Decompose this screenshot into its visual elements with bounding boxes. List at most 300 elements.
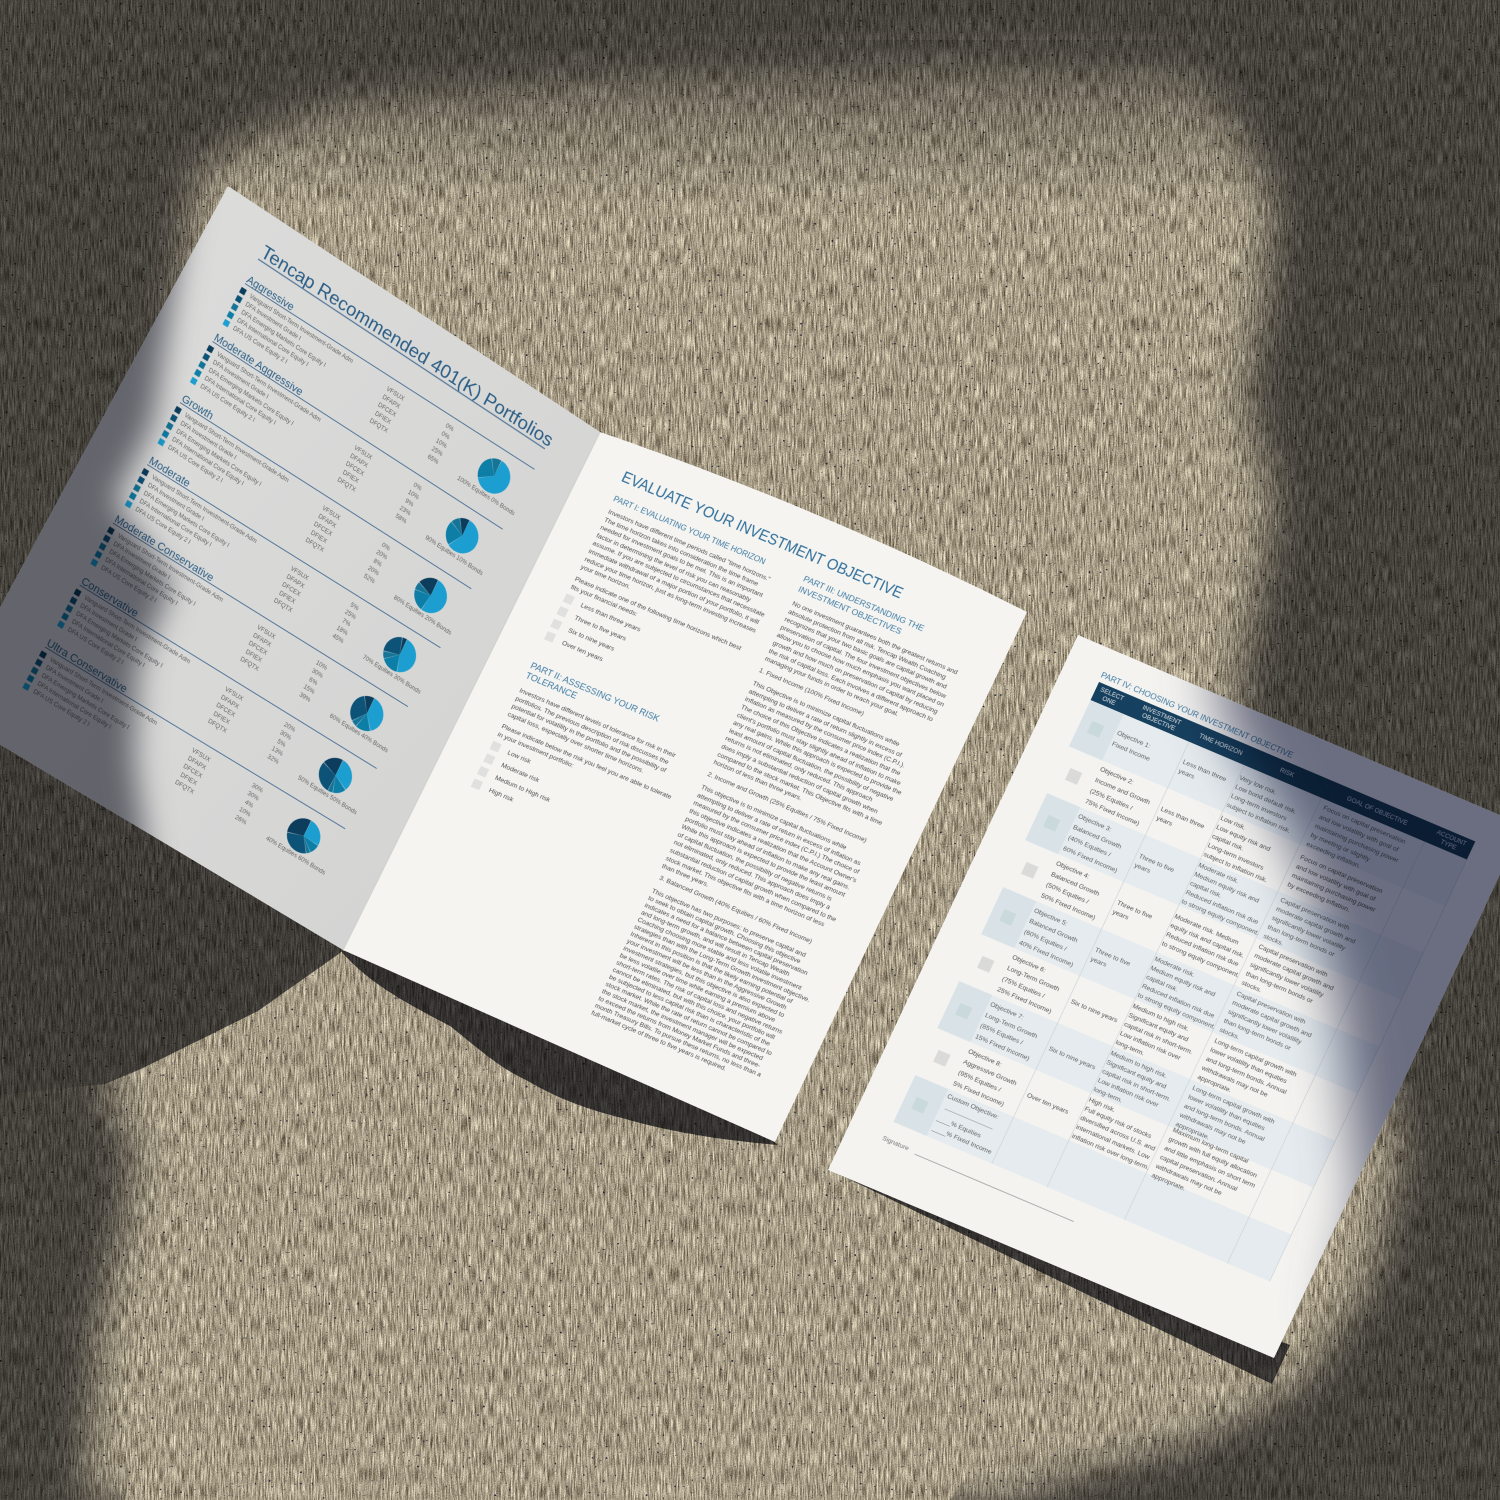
section: Growth: 8%	[372, 558, 383, 569]
row: objective 1: Fixed Income	[1110, 741, 1151, 763]
row: objective 6: lower volatility than equities	[1209, 1047, 1289, 1085]
row: objective 8: capital preservation. Annual	[1159, 1154, 1239, 1193]
section: Aggressive: DFA International Core Equity I	[236, 317, 309, 369]
row: objective 4: stocks.	[1240, 980, 1263, 994]
heading: Part IV: PART IV: CHOOSING YOUR INVESTMENT OBJECTIVE	[1099, 670, 1295, 760]
row: objective 7: (85% Equities /	[979, 1023, 1024, 1047]
left page shadow	[0, 232, 204, 844]
text block: Part II risk tolerance: Moderate risk	[500, 762, 541, 784]
text block: Part I time horizon: needed for investment goals to be met. This is an important	[599, 525, 764, 599]
row: objective 5: Reduced inflation risk due	[1141, 983, 1216, 1020]
section: Moderate: DFAPX	[285, 573, 305, 590]
section: Ultra Conservative: DFA Emerging Markets Core Equity I	[40, 672, 130, 731]
row: objective 6: 25% Fixed Income)	[996, 986, 1053, 1015]
row: objective 6: appropriate.	[1196, 1074, 1233, 1094]
text block: Part III understanding objectives: Coaching choosing more stable and less volatile investment	[636, 916, 803, 992]
section: Moderate Conservative: DFA International Core Equity I	[104, 557, 179, 608]
text block: Part III understanding objectives: short-term rates. The risk of capital loss and negative returns	[615, 959, 784, 1036]
text block: Part III understanding objectives: allow you to choose how much emphasis you want placed on	[775, 632, 945, 709]
text block: Part III understanding objectives: not eliminated, only reduced. This approach does imply a	[672, 839, 831, 912]
text block: Part III understanding objectives: substantial reduction of capital growth when compared to the	[668, 847, 837, 924]
section: Moderate Conservative: DFA Emerging Markets Core Equity I	[108, 549, 197, 608]
text block: Part I time horizon: Six to nine years	[567, 627, 616, 653]
title: Tencap Recommended 401(K) Portfolios: Tencap Recommended 401(K) Portfolios	[258, 242, 556, 451]
text block: Part III understanding objectives: Inherent in this position is that the likely earning potential of	[629, 931, 794, 1005]
section: Ultra Conservative: 30%	[246, 790, 260, 803]
row: objective 2: maintaining purchasing power	[1290, 872, 1377, 914]
text block: Part III understanding objectives: month Treasury Bills. To pursue these returns, no less than a	[594, 1002, 763, 1079]
row: objective 3: capital risk.	[1189, 880, 1223, 900]
section: Aggressive: DFA Emerging Markets Core Equity I	[240, 309, 327, 369]
row: objective 1: and low volatility with goal of	[1318, 814, 1400, 854]
text block: Part III understanding objectives: your investment will be less than in the Aggressive Growth	[626, 938, 788, 1011]
section: Ultra Conservative	[20, 637, 352, 877]
section: Aggressive	[220, 273, 542, 517]
text block: Part III understanding objectives: compared to the stock market. This Objective fits with a time	[716, 751, 884, 827]
section: Aggressive: VFSUX	[385, 386, 405, 403]
row: objective 5: capital risk.	[1145, 974, 1179, 994]
right page shadow	[1205, 660, 1500, 1400]
row: objective 2: and low volatility with goal of	[1295, 863, 1377, 903]
text block: Part III understanding objectives: least amount of capital fluctuation, the possibility of negative	[728, 728, 895, 803]
section: Ultra Conservative: 40% Equities 60% Bonds	[265, 836, 326, 877]
text block: Part III understanding objectives: be subjected to less capital risk than is characteristic of the	[608, 974, 771, 1048]
row: objective 4: Reduced inflation risk due	[1165, 932, 1240, 968]
row: objective 3: to strong equity component.	[1180, 898, 1260, 937]
text block: Part III understanding objectives: absolute protection from all risk. Tencap Wealth Coaching	[787, 608, 947, 681]
text block: Part III understanding objectives: of capital fluctuation, the possibility of negative returns is	[676, 832, 834, 903]
section: Moderate: 25%	[343, 609, 358, 622]
pie chart: Ultra Conservative	[281, 812, 326, 860]
text block: Part III understanding objectives: indicates a need for a balance between capital preservation	[643, 902, 809, 977]
section: Conservative: VFSUX	[223, 686, 244, 703]
section: Moderate Conservative: 10%	[314, 659, 329, 672]
text block: Part III understanding objectives: this objective indicates a realization that the Account Owner's	[688, 808, 858, 885]
row: objective 6: Six to nine years	[1069, 998, 1119, 1024]
section: Moderate: 18%	[335, 625, 349, 638]
section: Conservative: 32%	[266, 753, 280, 766]
row: custom objective: Custom Objective:	[946, 1093, 1000, 1121]
row: objective 5: 40% Fixed Income)	[1018, 939, 1074, 968]
section: Moderate Conservative: DFA US Core Equity 2 I	[100, 565, 158, 605]
row: objective 6: Long-Term Growth	[1006, 965, 1061, 993]
row: objective 4: (50% Equities /	[1045, 882, 1090, 906]
section: Conservative: 5%	[276, 738, 287, 749]
pie chart: Moderate Aggressive	[440, 511, 484, 560]
section: Ultra Conservative: 4%	[243, 799, 255, 810]
text block: Part I time horizon: PART I: EVALUATING YOUR TIME HORIZON	[612, 494, 767, 566]
table header: RISK	[1279, 767, 1296, 779]
row: custom objective: ____% Fixed Income	[930, 1124, 993, 1156]
row: objective 4: 50% Fixed Income)	[1040, 892, 1096, 922]
section: Ultra Conservative: DFAPX	[186, 755, 207, 772]
row: objective 2: Less than three	[1159, 806, 1206, 831]
section: Moderate Aggressive: DFCEX	[344, 460, 365, 478]
row: objective 8: growth with full equity allocation	[1167, 1136, 1258, 1180]
row: objective 1: Objective 1:	[1116, 730, 1152, 750]
section: Moderate Aggressive: DFA US Core Equity 2 I	[199, 383, 256, 424]
section: Moderate Conservative: 6%	[308, 676, 319, 687]
row: objective 5: than long-term bonds or	[1222, 1018, 1292, 1053]
row: objective 1: maintaining purchasing power	[1313, 823, 1400, 865]
section: Moderate Conservative: Vanguard Short-Term Investment-Grade Adm	[116, 533, 224, 604]
row: objective 2: years	[1155, 815, 1174, 828]
section: Conservative: DFA International Core Equity I	[70, 619, 146, 669]
section: Growth: DFCEX	[312, 521, 333, 538]
section: Moderate Aggressive: Moderate Aggressive	[212, 332, 305, 399]
row: objective 7: lower volatility than equities	[1187, 1094, 1267, 1132]
section: Aggressive: Aggressive	[245, 274, 296, 314]
section: Ultra Conservative: 30%	[250, 782, 265, 795]
section: Conservative: DFAPX	[219, 694, 240, 711]
text block: Part III understanding objectives: preservation of capital. The four investment objectives below	[779, 624, 947, 700]
row: objective 5	[1017, 905, 1317, 1067]
row: objective 5: significantly lower volatility	[1227, 1009, 1303, 1046]
section: Ultra Conservative: DFIEX	[179, 772, 198, 787]
section: Aggressive: 25%	[430, 445, 444, 459]
row: objective 3	[1061, 811, 1361, 973]
section: Ultra Conservative: DFQTX	[174, 779, 195, 796]
row: objective 6: capital risk in short-term.	[1123, 1021, 1194, 1056]
section: Moderate: 70% Equities 30% Bonds	[361, 655, 421, 696]
text block: Part III understanding objectives: portfolio must stay ahead of inflation to make any real gains.	[684, 816, 851, 891]
row: objective 2: Income and Growth	[1094, 777, 1151, 807]
row: objective 5: Three to five	[1094, 947, 1131, 968]
section: Ultra Conservative: 10%	[238, 806, 252, 819]
section: Moderate Conservative: 15%	[302, 683, 316, 696]
signature line: Signature	[881, 1135, 910, 1153]
text block: Part I time horizon: fits your financial needs:	[569, 584, 639, 618]
row: objective 8: and little emphasis on short term	[1163, 1145, 1256, 1190]
row: objective 2: Low risk.	[1219, 815, 1247, 832]
text block: Part II risk tolerance	[471, 661, 704, 858]
section: Conservative: DFIEX	[212, 711, 231, 726]
text block: Part III understanding objectives: be less volatile over time while earning a premium above	[618, 952, 777, 1024]
text block: Part II risk tolerance: in your investment portfolio:	[496, 731, 575, 769]
row: objective 5: to strong equity component.	[1136, 992, 1217, 1031]
text block: Part II risk tolerance: Please indicate below the risk you feel you are able to tolerate	[500, 723, 673, 801]
table header: ACCOUNT	[1435, 829, 1468, 848]
text block: Part I time horizon: immediate withdrawal of a major portion of your portfolio, it will	[587, 548, 761, 626]
text block: Part III understanding objectives: attempting to deliver a rate of return in excess of inflation as	[696, 792, 862, 867]
row: objective 8: (95% Equities /	[957, 1070, 1002, 1094]
row: objective 3: (40% Equities /	[1067, 835, 1112, 859]
section: Moderate: DFA International Core Equity I	[138, 498, 213, 549]
section: Aggressive: DFA US Core Equity 2 I	[231, 325, 289, 366]
row: objective 3: years	[1133, 862, 1152, 875]
section: Growth: DFA US Core Equity 2 I	[167, 444, 224, 485]
row: objective 4: to strong equity component.	[1160, 941, 1241, 980]
text block: Part III understanding objectives: to seek to obtain capital growth. Choosing this objective	[647, 895, 802, 965]
row: objective 3: than long-term bonds or	[1266, 924, 1336, 959]
section: Growth	[155, 392, 479, 637]
section: Conservative: DFA Investment Grade I	[79, 603, 138, 643]
text block: Part II risk tolerance: Low risk	[506, 750, 532, 766]
row: objective 6: withdrawals may not be	[1200, 1064, 1269, 1099]
row: objective 4: than long-term bonds or	[1244, 971, 1314, 1006]
text block: Part III understanding objectives: cannot be eliminated, but with this choice, your portfolio will	[611, 967, 777, 1041]
row: objective 3: Capital preservation with	[1279, 897, 1351, 932]
row: objective 6: Low inflation risk over	[1119, 1030, 1182, 1062]
row: objective 1: Less than three	[1181, 759, 1228, 784]
section: Aggressive: 0%	[444, 422, 455, 434]
row: objective 8: international markets. Low	[1075, 1124, 1151, 1161]
row: objective 2: subject to inflation risk.	[1202, 851, 1268, 884]
row: objective 1: Long-term investors	[1229, 793, 1288, 823]
row: objective 4	[1039, 858, 1339, 1020]
text block: Part III understanding objectives: stock market. This objective fits with a time horizon of less	[664, 855, 826, 928]
row: objective 1: Very low risk.	[1238, 775, 1278, 797]
row: objective 5: years	[1089, 956, 1108, 969]
section: Growth: Vanguard Short-Term Investment-Grade Adm	[183, 412, 290, 484]
section: Moderate Aggressive	[187, 331, 510, 577]
text block: Part III understanding objectives: recognizes that your two basic goals are capital growth and	[783, 616, 948, 691]
table header	[1091, 682, 1475, 860]
text block: Part III understanding objectives: 2. Income and Growth (25% Equities / 75% Fixed Income)	[706, 771, 868, 844]
row: objective 4: equity risk and capital risk.	[1169, 922, 1245, 960]
section: Moderate Aggressive: DFQTX	[336, 476, 357, 494]
section: Moderate: 5%	[349, 602, 360, 613]
row: objective 2: (25% Equities /	[1089, 788, 1134, 812]
text block: Part III understanding objectives: PART III: UNDERSTANDING THE	[802, 574, 926, 633]
section: Aggressive: Vanguard Short-Term Investment-Grade Adm	[248, 293, 354, 365]
row: objective 2: capital risk.	[1211, 833, 1245, 853]
row: objective 4: moderate capital growth and	[1253, 953, 1335, 992]
row: objective 7: appropriate.	[1174, 1121, 1211, 1141]
row: objective 5: (60% Equities /	[1023, 929, 1068, 953]
table header: GOAL OF OBJECTIVE	[1345, 795, 1409, 827]
section: Conservative: DFA US Core Equity 2 I	[66, 627, 125, 667]
row: objective 4: Objective 4:	[1055, 860, 1091, 881]
text block: Part III understanding objectives: strategies than with the Long-Term Growth investment objective.	[633, 924, 811, 1004]
section: Moderate: VFSUX	[289, 565, 310, 582]
row: custom objective	[930, 1093, 1008, 1156]
row: objective 8	[949, 1042, 1265, 1217]
text block: Part II risk tolerance: Investors have different levels of tolerance for risk in their	[518, 688, 677, 760]
section: Moderate Conservative: DFA Investment Grade I	[112, 541, 171, 582]
section: Moderate Conservative	[88, 513, 415, 755]
row: objective 5: Balanced Growth	[1028, 918, 1079, 945]
row: objective 6: Objective 6:	[1011, 954, 1047, 975]
row: objective 8: Over ten years	[1026, 1092, 1070, 1116]
table header: OBJECTIVE	[1141, 712, 1176, 732]
row: objective 8: Full equity risk of stocks	[1083, 1106, 1153, 1141]
text block: Part I time horizon: Please indicate one of the following time horizons which best	[573, 576, 742, 652]
row: objective 8: inflation risk over long-term.	[1070, 1133, 1150, 1172]
text block: Part III understanding objectives: growth and how much on preservation of capital by reducing	[771, 640, 939, 716]
section: Moderate: 7%	[341, 618, 352, 629]
row: objective 4: Moderate risk. Medium	[1173, 913, 1240, 947]
section: Moderate: 45%	[331, 633, 345, 646]
section: Conservative: 50% Equities 50% Bonds	[297, 775, 357, 817]
row: objective 2: by exceeding inflation.	[1286, 881, 1351, 914]
row: objective 7: and long-term bonds. Annual	[1183, 1103, 1266, 1143]
section: Growth: DFA International Core Equity I	[171, 436, 245, 488]
row: objective 1	[1103, 719, 1409, 883]
pie chart: Moderate	[377, 631, 422, 679]
row: objective 8: 5% Fixed Income)	[952, 1080, 1005, 1108]
row: objective 5: Medium equity risk and	[1149, 965, 1216, 999]
section: Moderate Aggressive: 0%	[412, 482, 423, 493]
row: objective 6: (75% Equities /	[1001, 976, 1046, 1000]
row: objective 5: stocks.	[1218, 1027, 1241, 1041]
table header: TYPE	[1439, 839, 1457, 852]
row: objective 4: years	[1111, 909, 1130, 922]
section: Aggressive: DFA Investment Grade I	[244, 301, 302, 343]
text block: Part III understanding objectives: managing your funds in order to reach your goal.	[763, 656, 900, 718]
row: objective 3: 60% Fixed Income)	[1062, 845, 1118, 875]
row: objective 6: Long-term capital growth with	[1213, 1038, 1298, 1079]
section: Ultra Conservative: DFA US Core Equity 2 I	[32, 688, 91, 728]
row: objective 5: Capital preservation with	[1235, 991, 1307, 1026]
row: objective 1: years	[1177, 768, 1196, 781]
section: Growth: 52%	[362, 573, 376, 586]
text block: Part III understanding objectives: returns is not eliminated, only reduced. This approach	[724, 735, 874, 804]
text block: Part III understanding objectives: measured by the consumer price index (C.P.I.) The choice of	[692, 800, 860, 876]
text block: Part III understanding objectives: This objective is to minimize capital fluctuations while	[700, 784, 848, 852]
table header: INVESTMENT	[1141, 704, 1182, 727]
section: Aggressive: 0%	[440, 430, 451, 442]
section: Moderate Aggressive: 23%	[398, 505, 412, 518]
pie chart: Conservative	[313, 751, 358, 800]
text block: Part III understanding objectives: the risk of capital loss. Each involves a different approach to	[767, 648, 934, 723]
section: Growth: 0%	[380, 542, 392, 553]
signature line	[881, 1135, 1076, 1223]
row: objective 3: Three to five	[1137, 853, 1175, 874]
section: Conservative: DFCEX	[215, 702, 236, 719]
row: objective 3: stocks.	[1262, 933, 1285, 947]
section: Moderate Conservative: DFQTX	[239, 656, 260, 673]
text block: Part II risk tolerance: TOLERANCE	[524, 671, 579, 701]
section: Aggressive: DFCEX	[377, 401, 397, 419]
section: Growth: DFQTX	[304, 537, 325, 554]
section: Moderate Aggressive: VFSUX	[353, 444, 373, 462]
section: Growth: VFSUX	[321, 505, 341, 522]
row: objective 4: Balanced Growth	[1050, 871, 1101, 898]
text block: Part III understanding objectives: and long-term growth, and will result in Tencap Wealth	[640, 909, 791, 978]
table header: ONE	[1101, 695, 1117, 707]
row: objective 1: by meeting or slightly	[1309, 832, 1371, 864]
section: Moderate Conservative: DFAPX	[252, 632, 272, 649]
text block: Part III understanding objectives: any real gains. While this approach is expected to provide the	[732, 720, 903, 797]
row: objective 6	[995, 952, 1298, 1115]
row: objective 7: Objective 7:	[989, 1001, 1025, 1022]
row: objective 1: Focus on capital preservation	[1322, 805, 1407, 846]
row: objective 8: Objective 8:	[967, 1048, 1003, 1069]
row: objective 3: Medium equity risk and	[1193, 871, 1260, 905]
row: objective 8: withdrawals may not be	[1153, 1163, 1223, 1197]
row: objective 2: Low equity risk and	[1215, 824, 1272, 853]
section: Moderate: DFA Emerging Markets Core Equity I	[142, 490, 230, 549]
row: objective 2	[1083, 764, 1388, 928]
section: Moderate: DFCEX	[281, 581, 302, 598]
row: objective 2: Objective 2:	[1099, 766, 1135, 787]
section: Moderate Aggressive: DFAPX	[349, 453, 369, 470]
row: objective 2: Focus on capital preservation	[1299, 854, 1384, 895]
section: Moderate Aggressive: DFA Emerging Markets Core Equity I	[207, 367, 295, 428]
text block: Part III understanding objectives	[587, 574, 984, 1090]
text block: Part I time horizon: Investors have different time periods called "time horizons."	[607, 509, 772, 583]
section: Growth: DFAPX	[317, 513, 337, 530]
section: Conservative: Vanguard Short-Term Investment-Grade Adm	[83, 595, 191, 666]
section: Conservative: 20%	[283, 721, 297, 734]
panel: right page, choosing your investment objective	[828, 635, 1500, 1400]
row: objective 4: Capital preservation with	[1257, 944, 1329, 979]
row: objective 5: Moderate risk.	[1153, 956, 1196, 979]
section: Moderate Conservative: 60% Equities 40% Bonds	[328, 714, 389, 755]
section: Moderate Conservative: Moderate Conservative	[112, 513, 215, 585]
section: Moderate: DFIEX	[278, 590, 296, 606]
section: Growth: Growth	[180, 393, 215, 423]
text block: Part I time horizon: reduce your time horizon, just as long-term investing increases	[583, 556, 758, 635]
row: objective 7: Low inflation risk over	[1097, 1077, 1160, 1109]
row: objective 6: and long-term bonds. Annual	[1205, 1056, 1288, 1096]
row: objective 7: Long-Term Growth	[984, 1012, 1039, 1040]
text block: Part III understanding objectives: While this approach is expected to provide the least amount	[680, 824, 846, 899]
text block: Part II risk tolerance: Medium to High risk	[494, 775, 552, 804]
row: objective 7: 15% Fixed Income)	[974, 1033, 1031, 1062]
section: Moderate: Moderate	[147, 455, 192, 490]
text block: Part I time horizon: assume. If you are subjected to circumstances that necessitate	[591, 540, 766, 619]
heading: Evaluate Your Investment Objective: EVALUATE YOUR INVESTMENT OBJECTIVE	[619, 469, 906, 602]
row: objective 7: Six to nine years	[1047, 1045, 1097, 1071]
text block: Part III understanding objectives: than three years.	[660, 863, 710, 889]
section: Moderate: DFQTX	[272, 597, 293, 614]
row: objective 1: exceeding inflation.	[1305, 841, 1362, 870]
text block: Part III understanding objectives: to exceed the returns from Money Market Funds and three-	[597, 995, 762, 1070]
row: objective 8: diversified across U.S. and	[1079, 1115, 1156, 1153]
section: Ultra Conservative: DFA International Core Equity I	[36, 680, 112, 731]
section: Aggressive: DFIEX	[374, 410, 392, 426]
panel: left page, recommended portfolios	[0, 150, 600, 950]
row: objective 3: Objective 3:	[1077, 813, 1113, 834]
text block: Part III understanding objectives: stock market. While the rate of return cannot be compared to	[604, 981, 773, 1057]
section: Growth: 80% Equities 20% Bonds	[392, 595, 452, 637]
row: objective 3: Balanced Growth	[1072, 824, 1123, 851]
text block: Part II risk tolerance: High risk	[487, 787, 515, 804]
section: Conservative: Conservative	[79, 575, 140, 620]
text block: Part III understanding objectives: client's portfolio must stay slightly ahead of inflation to make	[736, 712, 902, 787]
table header: TIME HORIZON	[1198, 733, 1244, 757]
row: objective 5: moderate capital growth and	[1231, 1000, 1313, 1039]
text block: Part I time horizon: Less than three years	[579, 602, 642, 634]
section: Conservative: DFQTX	[207, 718, 228, 735]
section: Growth: DFIEX	[309, 529, 328, 545]
section: Moderate Conservative: DFCEX	[247, 640, 268, 657]
text block: Part III understanding objectives: does imply a substantial reduction of capital growth when	[720, 743, 879, 816]
text block: Part III understanding objectives: INVESTMENT OBJECTIVES	[797, 584, 904, 636]
text block: Part III understanding objectives: inflation as measured by the consumer price index (C.P.I.).	[743, 696, 906, 770]
section: Growth: DFA Emerging Markets Core Equity I	[175, 428, 263, 488]
text block: Part I time horizon: your time horizon.	[579, 564, 632, 591]
row: objective 8: Aggressive Growth	[962, 1059, 1018, 1088]
section: Moderate Conservative: 30%	[310, 667, 324, 680]
panel: centre page, evaluate your investment objective	[343, 432, 1027, 1142]
section: Moderate: DFA Investment Grade I	[146, 482, 205, 523]
section: Moderate Aggressive: 58%	[394, 513, 408, 526]
section: Conservative: DFA Emerging Markets Core Equity I	[75, 611, 164, 670]
row: objective 3: Moderate risk.	[1197, 862, 1240, 885]
section: Moderate Aggressive: 90% Equities 10% Bonds	[424, 535, 483, 577]
section: Conservative: 13%	[270, 745, 284, 758]
row: custom objective: ____% Equities	[935, 1115, 983, 1140]
row: objective 7	[973, 999, 1276, 1162]
text block: Part III understanding objectives: 3. Balanced Growth (40% Equities / 60% Fixed Income)	[658, 875, 813, 945]
pie chart: Moderate Conservative	[344, 689, 389, 738]
section: Aggressive: DFAPX	[381, 394, 401, 411]
text block: Part III understanding objectives: This objective has two purposes: to preserve capital and	[650, 888, 807, 959]
row: objective 1: Low bond default risk.	[1234, 784, 1298, 816]
